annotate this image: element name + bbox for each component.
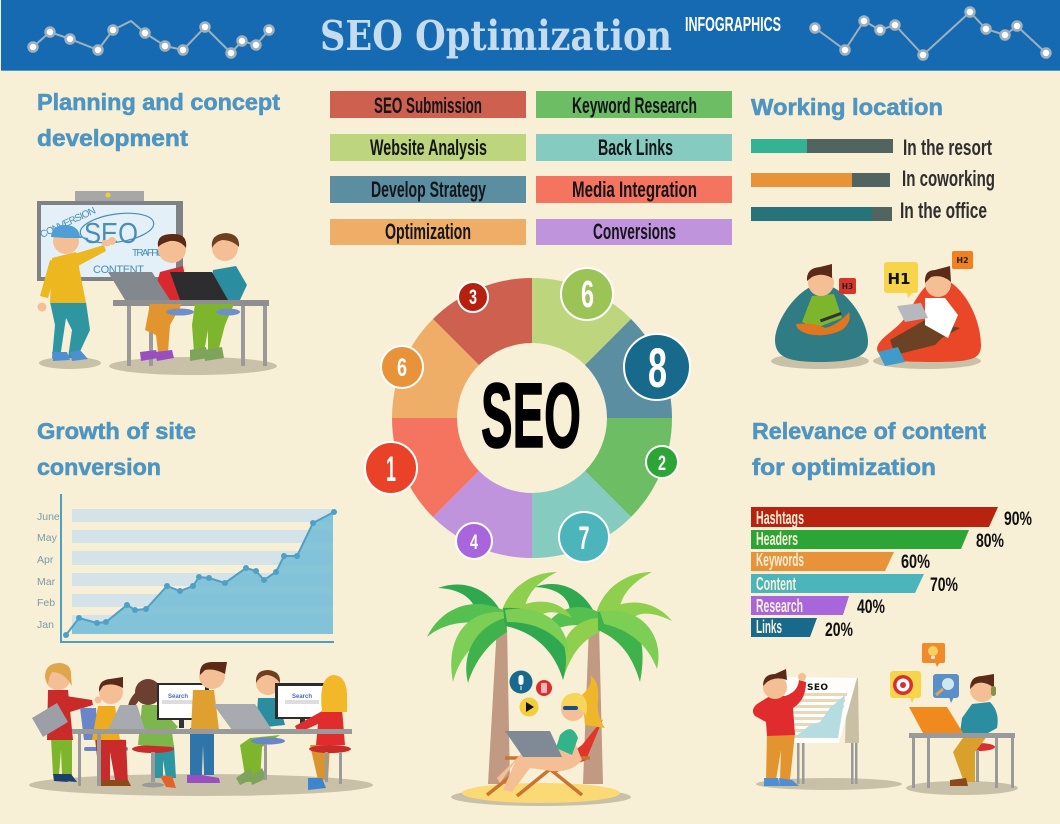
woman in deckchair <box>487 675 605 796</box>
axis month labels: Feb <box>37 597 55 609</box>
seated boy with chair <box>80 677 131 786</box>
heading: growth: conversion <box>37 454 161 480</box>
badge 6 orange: 6 <box>397 354 407 382</box>
pill: Website Analysis: Website Analysis <box>370 135 487 160</box>
axis month labels: Jan <box>37 619 54 631</box>
illustration: freelancer under palm trees <box>427 572 672 806</box>
axis month labels: Apr <box>37 554 54 566</box>
heading: working location: Working location <box>751 94 943 120</box>
badge 2: 2 <box>658 452 666 475</box>
bar: hashtags: 90% <box>1004 509 1032 530</box>
H3 bubble: H3 <box>842 282 853 291</box>
illustration: presenter with SEO flip chart <box>753 669 902 790</box>
bar: headers <box>751 529 1004 552</box>
illustration: planning team at whiteboard <box>37 191 277 375</box>
specialist <box>950 674 998 786</box>
axis month labels: June <box>37 511 60 523</box>
relevance bar chart <box>751 507 1032 641</box>
presenter man <box>753 669 806 786</box>
SEO wheel <box>365 268 690 562</box>
bar: hashtags <box>751 507 1032 530</box>
bar: content <box>751 574 958 596</box>
icon: magnifier bubble <box>933 674 959 703</box>
monitor 2: Search <box>292 694 312 700</box>
presenter <box>38 225 116 361</box>
bar: content: Content <box>756 574 796 594</box>
standing man <box>187 662 227 783</box>
badge 2 <box>646 446 678 478</box>
left palm crown <box>427 572 572 683</box>
pill: Conversions <box>536 219 732 245</box>
team laptops and desk <box>72 704 352 786</box>
title: SEO Optimization <box>320 12 672 60</box>
header banner <box>1 0 1060 71</box>
pill: Back Links <box>536 134 732 161</box>
axis month labels: Mar <box>37 576 56 588</box>
heading: growth <box>37 418 196 480</box>
seated man <box>236 670 285 785</box>
pill: Optimization: Optimization <box>385 219 471 244</box>
H2 bubble <box>952 251 973 269</box>
illustration: specialist at laptop with icons <box>890 643 1018 795</box>
bar: hashtags: Hashtags <box>756 508 804 528</box>
seated person teal <box>190 233 247 361</box>
badge 7: 7 <box>578 520 590 556</box>
heading: growth: Growth of site <box>37 418 196 444</box>
heading: relevance: for optimization <box>752 454 936 480</box>
palm trunks <box>488 625 603 784</box>
pill: Keyword Research: Keyword Research <box>572 93 697 118</box>
badge 6 green <box>561 268 613 320</box>
badge 6 orange <box>381 346 423 388</box>
H1 bubble <box>884 262 918 298</box>
whiteboard: CONVERSION <box>39 205 98 241</box>
bar: links: 20% <box>825 620 853 641</box>
heading: planning: Planning and concept <box>37 89 280 115</box>
icon: target bubble <box>890 671 921 703</box>
bar: keywords: Keywords <box>756 550 804 570</box>
bar: research: 40% <box>857 597 885 618</box>
badge 4 <box>456 523 492 559</box>
whiteboard <box>37 191 183 281</box>
person in white coat <box>878 266 960 366</box>
pill: SEO Submission: SEO Submission <box>374 93 482 118</box>
pill: Back Links: Back Links <box>598 135 673 160</box>
pill: Conversions: Conversions <box>593 219 676 244</box>
red bean bag <box>877 277 981 362</box>
working location bars <box>751 135 995 223</box>
header left line decoration <box>28 21 274 58</box>
whiteboard: CONTENT <box>93 264 144 276</box>
pill: SEO Submission <box>330 91 526 118</box>
H1 bubble: H1 <box>888 270 910 288</box>
teal bean bag <box>775 284 868 362</box>
badge 1 <box>365 442 417 494</box>
pill: Keyword Research <box>536 91 732 118</box>
heading: planning: development <box>37 125 188 151</box>
illustration: team at computers <box>29 662 373 796</box>
desk and laptop <box>909 707 1015 788</box>
bar: keywords: 60% <box>901 552 930 573</box>
wheel segments <box>392 278 672 558</box>
bar: in coworking: In coworking <box>902 166 995 191</box>
heading: relevance <box>752 418 986 480</box>
bar: in the resort <box>751 135 992 160</box>
monitor 1: Search <box>168 694 188 700</box>
H3 bubble <box>839 278 856 294</box>
flip chart: SEO <box>807 683 828 693</box>
pill: Media Integration: Media Integration <box>572 177 697 202</box>
seated person red <box>140 234 194 361</box>
badge 3: 3 <box>469 286 477 309</box>
subtitle: INFOGRAPHICS <box>685 14 781 36</box>
laptops and desk <box>113 300 269 366</box>
badge 7 <box>559 512 609 562</box>
blonde woman <box>295 675 351 790</box>
badge 6 green: 6 <box>581 274 594 316</box>
badge 8 <box>624 334 690 400</box>
axis month labels: May <box>37 532 58 544</box>
badge 4: 4 <box>470 531 478 554</box>
bar: links: Links <box>756 617 782 637</box>
monitor 1 <box>157 683 209 728</box>
pill: Develop Strategy: Develop Strategy <box>371 177 486 202</box>
heading: relevance: Relevance of content <box>752 418 986 444</box>
icon: play <box>520 698 538 716</box>
axis month labels <box>37 511 60 631</box>
standing woman with folder <box>32 663 102 782</box>
bar: headers: Headers <box>756 529 798 549</box>
bar: keywords <box>751 550 930 573</box>
seated girl <box>128 679 178 788</box>
icon: phone <box>536 680 552 696</box>
pill: Media Integration <box>536 176 732 203</box>
bar: research: Research <box>756 596 803 616</box>
pill: Website Analysis <box>330 134 526 161</box>
monitor 2 <box>275 683 328 727</box>
bar: in the resort: In the resort <box>903 135 992 160</box>
bar: in the office <box>751 198 987 223</box>
bar: in the office: In the office <box>900 198 987 223</box>
badge 3 <box>458 282 488 312</box>
badge 1: 1 <box>386 450 396 489</box>
whiteboard: TRAFFIC <box>132 248 164 259</box>
heading: planning <box>37 89 280 151</box>
bar: in coworking <box>751 166 995 191</box>
badge 8: 8 <box>648 336 667 399</box>
flip chart <box>785 677 859 784</box>
whiteboard: SEO <box>84 218 138 250</box>
illustration: working on bean bags <box>771 251 981 369</box>
keyword legend <box>330 91 732 245</box>
right palm crown <box>535 572 672 682</box>
icon: light bulb bubble <box>922 643 945 667</box>
person in green <box>796 264 850 335</box>
icon: microphone <box>510 670 532 694</box>
wheel centre label: SEO <box>481 365 581 467</box>
bar: headers: 80% <box>976 531 1004 552</box>
sand <box>462 783 620 803</box>
bar: research <box>751 596 885 618</box>
growth area chart <box>37 494 337 642</box>
pill: Develop Strategy <box>330 176 526 203</box>
H2 bubble: H2 <box>956 256 969 265</box>
header right line decoration <box>810 8 1050 60</box>
bar: links <box>751 617 853 641</box>
pill: Optimization <box>330 219 526 245</box>
bar: content: 70% <box>930 575 958 596</box>
